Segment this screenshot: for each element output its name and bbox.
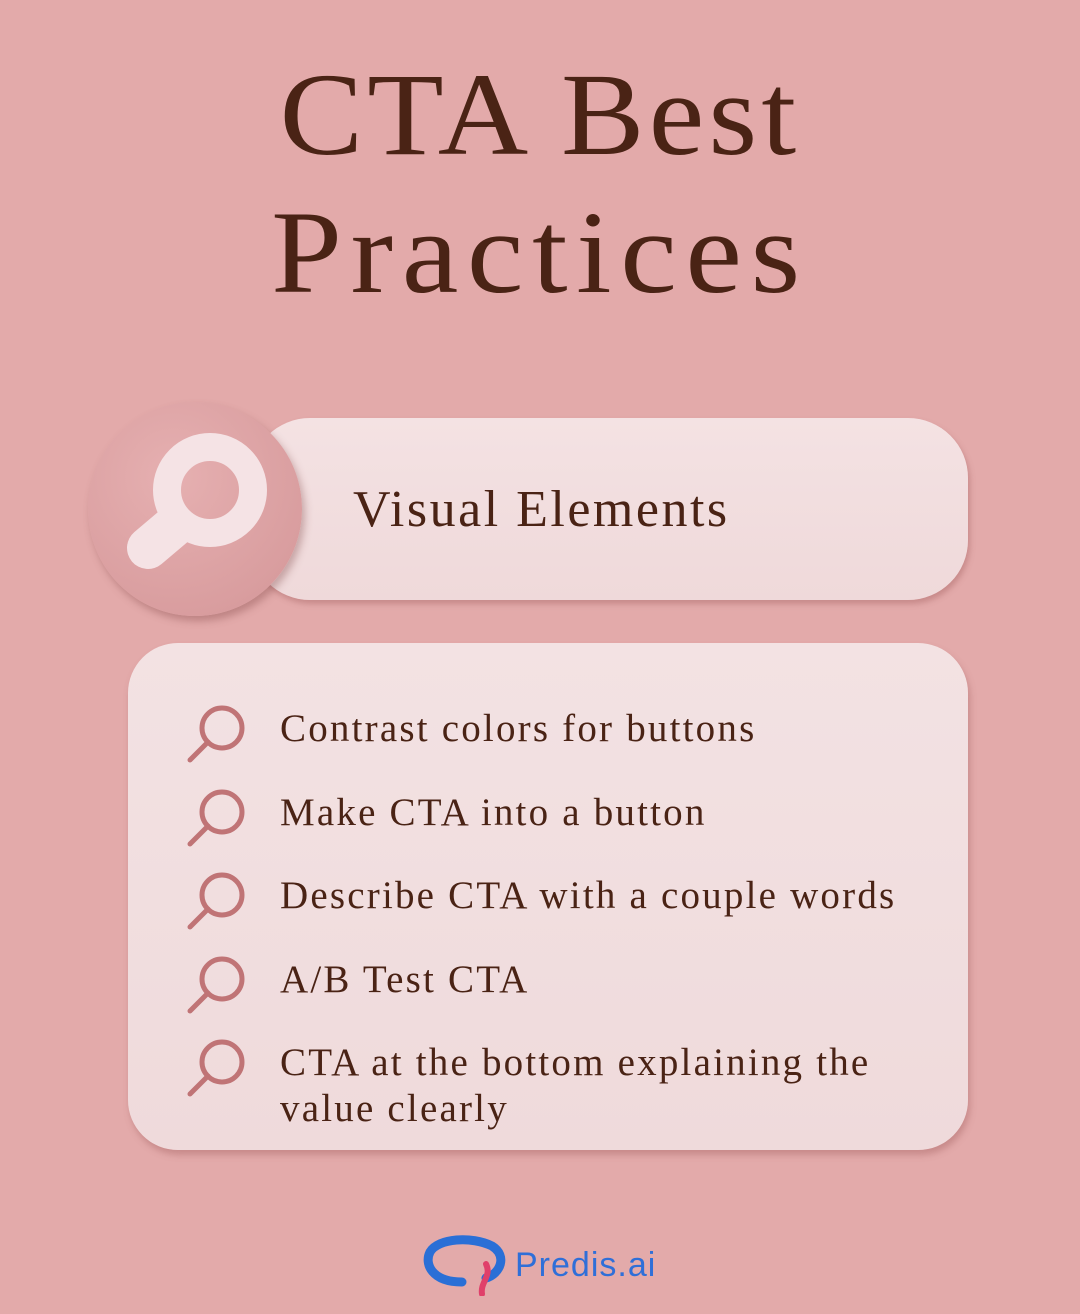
text 5: CTA at the bottom explaining the	[280, 1041, 870, 1084]
title	[271, 49, 809, 318]
icon: magnifier 5	[188, 1040, 244, 1096]
panel: list	[128, 643, 968, 1150]
text 3: Describe CTA with a couple words	[280, 874, 896, 917]
icon: logo mark	[424, 1235, 506, 1296]
heading: Visual Elements: Visual Elements	[353, 481, 730, 538]
text 5	[280, 1041, 870, 1130]
icon: magnifier 2	[188, 790, 244, 846]
title: Practices	[271, 187, 809, 318]
brand text: Predis.ai	[515, 1246, 656, 1284]
text 5: value clearly	[280, 1087, 509, 1130]
text 2: Make CTA into a button	[280, 791, 707, 834]
text 4: A/B Test CTA	[280, 958, 530, 1001]
icon: magnifier badge	[88, 402, 302, 616]
icon: magnifier 3	[188, 872, 244, 930]
text 1: Contrast colors for buttons	[280, 707, 756, 750]
logo	[424, 1235, 656, 1296]
icon: magnifier 4	[188, 956, 244, 1014]
pill background	[250, 418, 968, 600]
icon: magnifier 1	[188, 706, 244, 762]
header pill	[88, 418, 972, 624]
title: CTA Best	[280, 49, 800, 180]
